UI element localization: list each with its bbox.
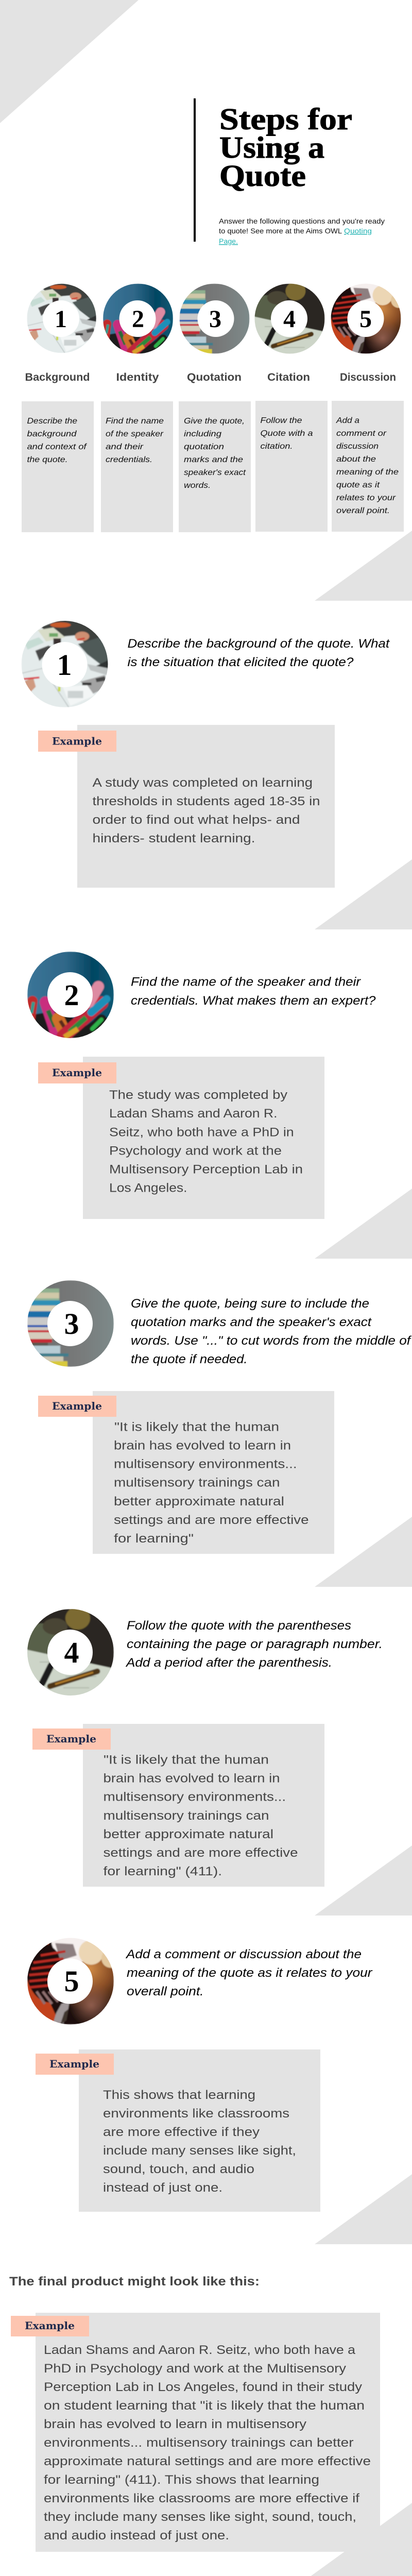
step 2 example panel: Multisensory Perception Lab in xyxy=(109,1162,303,1177)
step 5 question: Add a comment or discussion about the xyxy=(125,1947,362,1961)
step 5 example tag: Example xyxy=(49,2058,99,2070)
step 5 icon xyxy=(21,1913,120,2028)
overview panel: Quotation: quotation xyxy=(184,443,224,451)
overview label: Quotation: Quotation xyxy=(187,371,242,383)
overview panel: Quotation: marks and the xyxy=(184,455,243,464)
step 4 question: containing the page or paragraph number. xyxy=(127,1637,383,1651)
overview panel: Discussion: relates to your xyxy=(336,494,396,502)
step 4 example panel: multisensory environments... xyxy=(103,1790,286,1804)
decorative shape: right 1 xyxy=(315,531,412,601)
step 3 question: the quote if needed. xyxy=(131,1352,247,1366)
step 5 example panel: include many senses like sight, xyxy=(103,2144,296,2158)
step 4 example panel: "It is likely that the human xyxy=(104,1753,269,1767)
step 3 question: quotation marks and the speaker's exact xyxy=(131,1315,372,1329)
final example panel: environments... multisensory trainings can better xyxy=(44,2436,354,2450)
step 5 icon: 5 xyxy=(64,1964,79,1998)
overview panel: Discussion: about the xyxy=(336,455,376,464)
overview panel: Identity: of the speaker xyxy=(106,430,164,438)
step 4 example tag: Example xyxy=(46,1733,96,1745)
step 4 example panel: multisensory trainings can xyxy=(103,1809,269,1823)
title: Using a xyxy=(219,130,324,164)
step 2 question: Find the name of the speaker and their xyxy=(131,975,361,989)
step 4 example tag xyxy=(32,1728,111,1750)
step 5 example panel: This shows that learning xyxy=(103,2088,255,2102)
step 4 example panel xyxy=(83,1724,324,1887)
step 5 question: overall point. xyxy=(127,1985,204,1998)
overview panel: Background xyxy=(22,401,94,532)
step 3 question: Give the quote, being sure to include the xyxy=(131,1297,369,1311)
step 2 example panel: Seitz, who both have a PhD in xyxy=(109,1125,294,1140)
decorative shape: top left xyxy=(0,0,139,123)
title divider bar xyxy=(194,98,196,242)
step 5 example panel: sound, touch, and audio xyxy=(103,2162,254,2176)
final example panel: approximate natural settings and are more effective xyxy=(44,2454,371,2468)
title: Quote xyxy=(219,159,306,193)
step 4 question: Add a period after the parenthesis. xyxy=(125,1656,332,1670)
final example panel: on student learning that "it is likely that the human xyxy=(44,2399,365,2413)
step 2 example panel: Ladan Shams and Aaron R. xyxy=(109,1107,277,1121)
overview panel: Citation: Follow the xyxy=(261,416,302,425)
step 4 icon: 4 xyxy=(64,1636,79,1669)
overview panel: Background: Describe the xyxy=(27,417,77,426)
step 3 example panel: for learning" xyxy=(114,1532,194,1546)
step 3 example panel: better approximate natural xyxy=(114,1495,284,1509)
step overview icon 2 xyxy=(103,283,173,354)
step 3 example panel: multisensory trainings can xyxy=(114,1476,280,1490)
final example panel: brain has evolved to learn in multisensory xyxy=(44,2417,306,2431)
step 3 example panel xyxy=(93,1391,334,1554)
final example panel: they include many senses like sight, sound, touch, xyxy=(44,2510,356,2524)
step overview icon 3: 3 xyxy=(209,306,221,333)
step 4 example panel: for learning" (411). xyxy=(103,1865,222,1878)
final example tag xyxy=(11,2316,89,2336)
overview panel: Quotation: words. xyxy=(184,481,211,490)
step 2 icon: 2 xyxy=(64,978,79,1012)
step 5 example tag xyxy=(36,2054,114,2075)
step 1 question xyxy=(128,637,390,669)
overview panel: Discussion xyxy=(332,401,404,532)
step 1 question: Describe the background of the quote. What xyxy=(128,637,390,651)
final example panel: and audio instead of just one. xyxy=(44,2529,229,2543)
intro text with link: Answer the following questions and you're ready xyxy=(219,217,385,225)
step 2 question xyxy=(131,975,376,1008)
step 3 question xyxy=(131,1297,412,1366)
step 4 example panel: better approximate natural xyxy=(103,1827,273,1841)
final example panel: for learning" (411). This shows that learning xyxy=(44,2473,319,2487)
step 1 icon xyxy=(22,618,111,707)
step 1 example tag xyxy=(38,731,116,752)
step 3 icon: 3 xyxy=(64,1307,79,1341)
title: Steps for xyxy=(219,102,352,136)
step 2 example panel: Los Angeles. xyxy=(109,1181,187,1195)
decorative shape: right 3 xyxy=(315,1189,412,1259)
step 3 example panel: multisensory environments... xyxy=(114,1457,297,1471)
overview panel: Identity xyxy=(101,401,173,532)
overview panel: Citation xyxy=(255,401,328,532)
overview label: Citation: Citation xyxy=(267,371,310,383)
overview panel: Background: the quote. xyxy=(27,455,68,464)
overview panel: Quotation xyxy=(179,401,251,532)
overview label: Background: Background xyxy=(25,371,90,383)
overview panel: Quotation: Give the quote, xyxy=(184,417,245,426)
step 2 example tag xyxy=(38,1062,116,1083)
step 1 icon: 1 xyxy=(57,648,72,682)
step 5 question xyxy=(125,1947,373,1998)
step 2 example tag: Example xyxy=(52,1066,102,1079)
step overview icon 1 xyxy=(27,281,98,353)
step 4 icon xyxy=(24,1607,117,1699)
final example tag: Example xyxy=(25,2319,75,2332)
step 2 example panel: The study was completed by xyxy=(109,1088,287,1102)
step 5 example panel: are more effective if they xyxy=(103,2125,260,2139)
step 1 example panel: thresholds in students aged 18-35 in xyxy=(93,794,320,808)
final example panel xyxy=(36,2313,380,2552)
final example panel: Ladan Shams and Aaron R. Seitz, who both have a xyxy=(44,2343,356,2357)
final example panel: environments like classrooms are more effective if xyxy=(44,2492,359,2505)
step 5 example panel: instead of just one. xyxy=(103,2181,222,2195)
step 4 example panel: settings and are more effective xyxy=(103,1846,298,1860)
overview panel: Quotation: speaker's exact xyxy=(184,468,246,477)
intro text with link: Page. xyxy=(219,237,238,245)
step 2 example panel xyxy=(83,1057,324,1219)
final example panel: Perception Lab in Los Angeles, found in their study xyxy=(44,2380,362,2394)
overview panel: Discussion: quote as it xyxy=(336,481,380,489)
decorative shape: bottom right xyxy=(272,2503,412,2576)
step 1 example tag: Example xyxy=(52,735,102,747)
overview panel: Discussion: Add a xyxy=(336,416,359,425)
final example panel: PhD in Psychology and work at the Multisensory xyxy=(44,2362,346,2376)
step 1 example panel: order to find out what helps- and xyxy=(93,813,300,827)
step 3 example tag xyxy=(38,1396,116,1417)
step overview icon 5: 5 xyxy=(359,306,372,333)
step overview icon 5 xyxy=(325,264,406,356)
step 2 example panel: Psychology and work at the xyxy=(109,1144,282,1158)
final product heading: The final product might look like this: xyxy=(9,2275,260,2289)
overview panel: Quotation: including xyxy=(184,430,221,438)
step overview icon 2: 2 xyxy=(132,306,144,333)
decorative shape: right 2 xyxy=(315,859,412,929)
step 3 example panel: brain has evolved to learn in xyxy=(114,1438,291,1453)
overview panel: Discussion: discussion xyxy=(336,442,379,451)
step overview icon 4: 4 xyxy=(283,306,296,333)
step 2 icon xyxy=(27,952,114,1038)
step 3 example panel: settings and are more effective xyxy=(114,1513,309,1527)
overview panel: Identity: credentials. xyxy=(106,455,152,464)
overview panel: Background: and context of xyxy=(27,443,87,451)
intro text with link: Quoting xyxy=(344,227,372,235)
overview panel: Citation: Quote with a xyxy=(261,429,313,438)
step 2 question: credentials. What makes them an expert? xyxy=(131,994,376,1008)
intro text with link: to quote! See more at the Aims OWL xyxy=(219,227,342,235)
overview panel: Discussion: overall point. xyxy=(336,506,390,515)
decorative shape: right 5 xyxy=(315,1845,412,1916)
step overview icon 4 xyxy=(252,282,327,356)
intro text with link xyxy=(219,217,385,245)
step 5 example panel: environments like classrooms xyxy=(103,2107,289,2121)
step 5 question: meaning of the quote as it relates to your xyxy=(127,1966,373,1980)
overview panel: Identity: and their xyxy=(106,443,144,451)
step 5 example panel xyxy=(79,2049,320,2212)
step 3 example tag: Example xyxy=(52,1400,102,1412)
step 1 example panel: A study was completed on learning xyxy=(93,776,313,790)
overview label: Identity: Identity xyxy=(116,371,159,383)
overview panel: Citation: citation. xyxy=(261,442,293,451)
decorative shape: right 4 xyxy=(315,1517,412,1587)
step 1 example panel xyxy=(77,725,335,888)
step overview icon 3 xyxy=(179,283,250,354)
decorative shape: right 6 xyxy=(315,2174,412,2244)
step 4 example panel: brain has evolved to learn in xyxy=(103,1771,280,1786)
step 1 example panel: hinders- student learning. xyxy=(93,832,255,845)
step overview icon 1: 1 xyxy=(55,306,67,333)
step 1 question: is the situation that elicited the quote? xyxy=(128,655,354,669)
step 3 question: words. Use "..." to cut words from the middle of xyxy=(131,1334,412,1348)
overview label: Discussion: Discussion xyxy=(340,371,396,383)
overview panel: Identity: Find the name xyxy=(106,417,164,426)
overview panel: Background: background xyxy=(27,430,77,438)
step 3 icon xyxy=(27,1280,114,1367)
title xyxy=(219,102,352,193)
overview panel: Discussion: comment or xyxy=(336,429,387,438)
overview panel: Discussion: meaning of the xyxy=(336,468,399,477)
step 4 question: Follow the quote with the parentheses xyxy=(127,1619,351,1633)
step 3 example panel: "It is likely that the human xyxy=(114,1420,279,1434)
step 4 question xyxy=(125,1619,383,1670)
